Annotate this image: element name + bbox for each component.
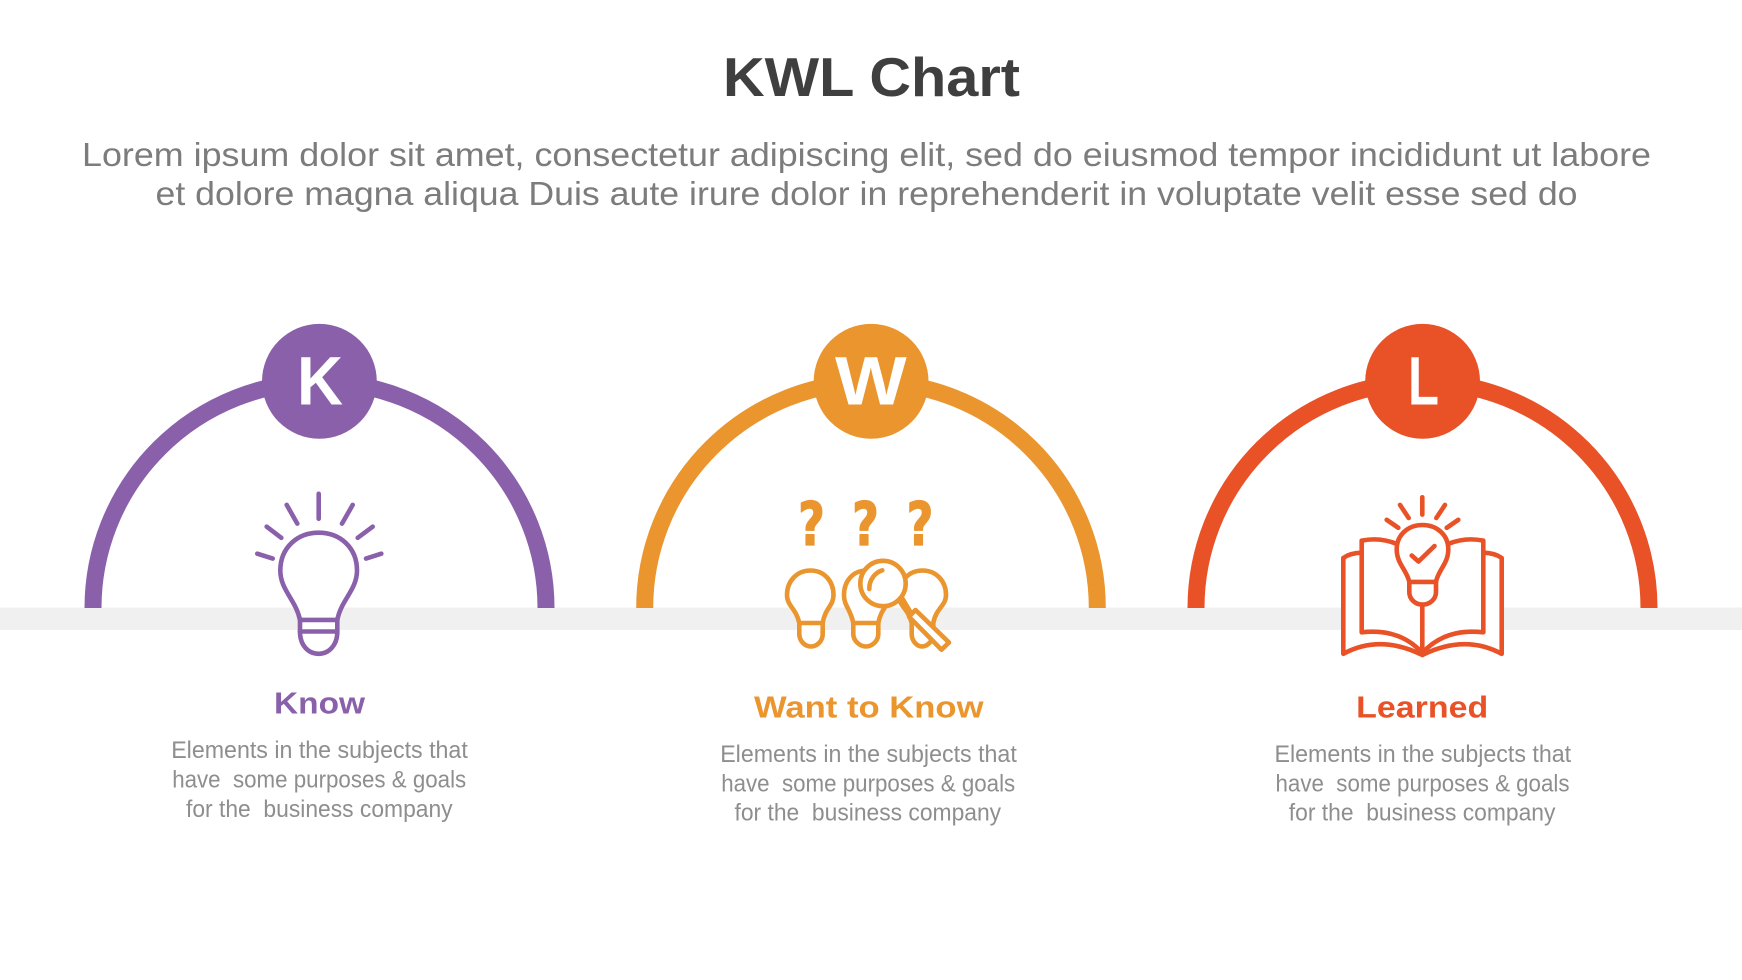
icon: question marks with bulbs and magnifier (787, 490, 949, 650)
panel: Know (93, 324, 546, 823)
badge: W (814, 324, 928, 439)
subtitle text block: et dolore magna aliqua Duis aute irure dolor in reprehenderit in voluptate velit esse sed do (156, 175, 1578, 212)
badge: W: W (835, 342, 908, 420)
panel: Want to Know (645, 324, 1097, 827)
description: Learned: have some purposes & goals (1276, 770, 1570, 797)
horizontal baseline band (0, 608, 1742, 630)
description: Learned: Elements in the subjects that (1274, 741, 1571, 768)
heading: Learned: Learned (1356, 690, 1488, 724)
subtitle text block (82, 136, 1651, 212)
semicircle arc: Learned (1196, 382, 1649, 608)
icon: open book with bulb and check mark (1343, 497, 1502, 655)
badge: K: K (297, 342, 343, 420)
semicircle arc: Want to Know (645, 382, 1097, 608)
badge: L (1365, 324, 1480, 439)
icon: question marks with bulbs and magnifier: ? (852, 490, 879, 560)
heading: Know: Know (274, 686, 366, 720)
icon: question marks with bulbs and magnifier: ? (906, 490, 934, 560)
description: Know: for the business company (186, 796, 453, 823)
description: Learned: for the business company (1289, 800, 1555, 827)
badge: K (262, 324, 377, 439)
panel: Learned (1196, 324, 1649, 827)
description: Want to Know: for the business company (734, 800, 1001, 827)
badge: L: L (1408, 342, 1439, 420)
description: Want to Know (720, 741, 1017, 827)
description: Want to Know: have some purposes & goals (721, 770, 1015, 797)
semicircle arc: Know (93, 382, 546, 608)
subtitle text block: Lorem ipsum dolor sit amet, consectetur adipiscing elit, sed do eiusmod tempor incididunt ut labore (82, 136, 1651, 173)
description: Know (171, 737, 468, 823)
description: Know: Elements in the subjects that (171, 737, 468, 764)
icon: light bulb (257, 494, 381, 654)
heading: Want to Know: Want to Know (754, 690, 984, 724)
description: Learned (1274, 741, 1571, 827)
icon: question marks with bulbs and magnifier: ? (798, 490, 825, 560)
description: Know: have some purposes & goals (172, 766, 466, 794)
title: KWL Chart (723, 46, 1020, 108)
description: Want to Know: Elements in the subjects that (720, 741, 1017, 768)
